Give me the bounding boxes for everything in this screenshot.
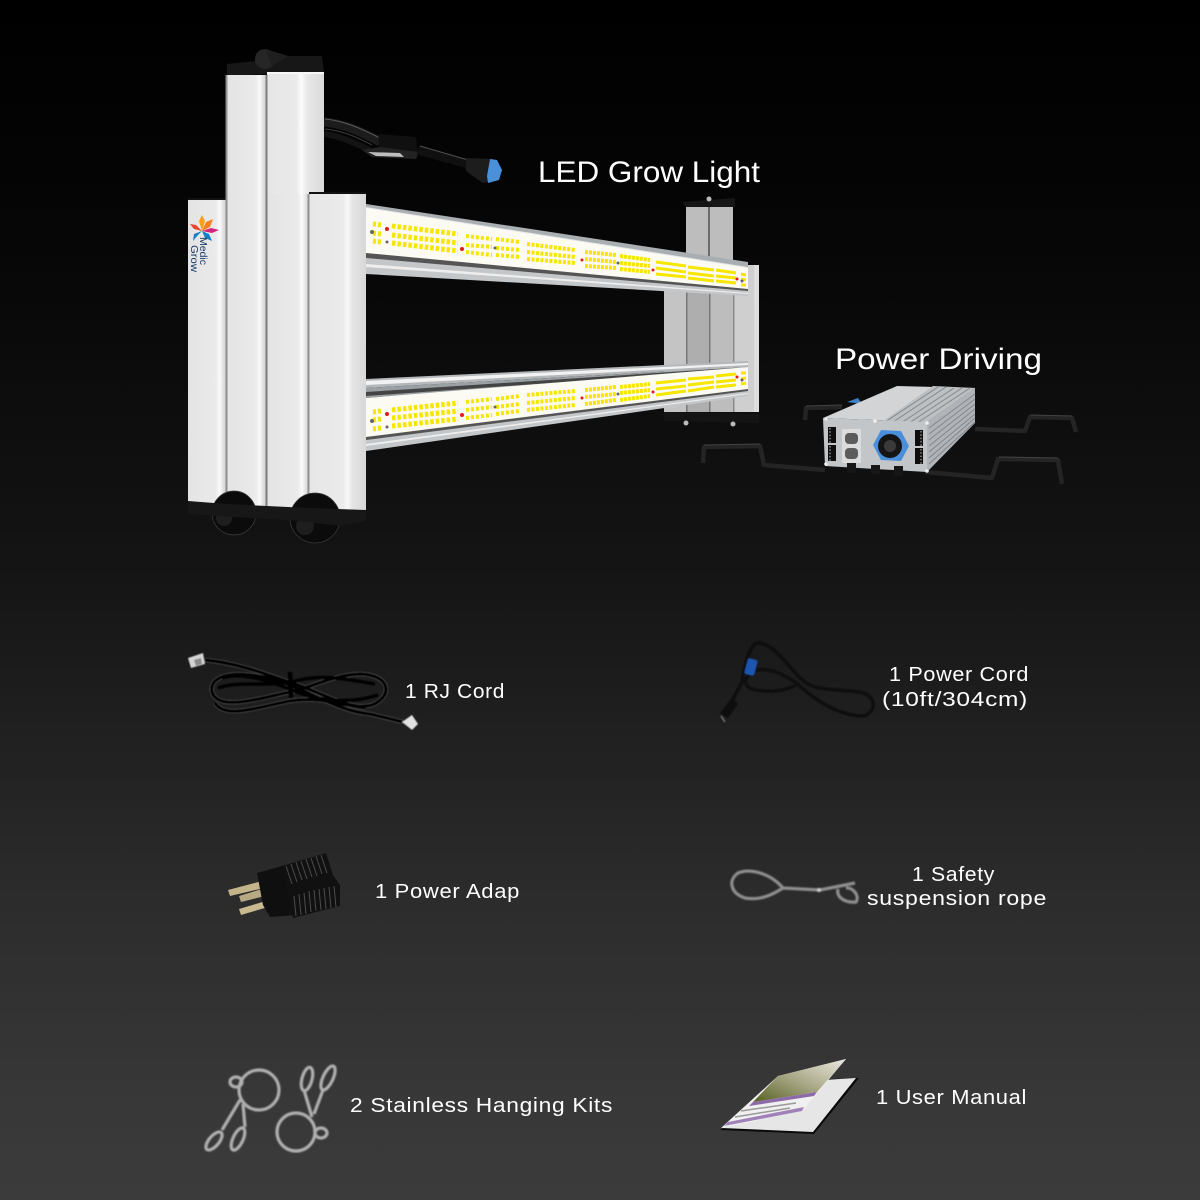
rear end bracket	[664, 196, 759, 426]
label: 1 RJ Cord: 1 RJ Cord	[405, 681, 505, 703]
power adapter	[228, 853, 340, 918]
power cord	[720, 643, 873, 722]
power cable with connector	[324, 119, 502, 183]
kit 2	[277, 1064, 338, 1151]
column B	[227, 75, 266, 506]
label: 1 Power Cord (10ft/304cm)	[882, 664, 1029, 711]
mounting column group	[188, 49, 366, 543]
front plate	[823, 418, 927, 472]
RJ ports	[842, 429, 861, 463]
lower LED bar	[366, 361, 748, 451]
top fins	[823, 386, 975, 422]
safety suspension rope	[732, 871, 857, 902]
label: 1 Safety suspension rope: suspension rope	[867, 888, 1047, 910]
logo: Medic Grow: Medic	[197, 237, 209, 265]
bottom wheels and base	[188, 491, 366, 543]
column D	[309, 192, 366, 510]
stainless hanging kits	[203, 1064, 338, 1153]
label: 1 Power Adap: 1 Power Adap	[375, 881, 520, 903]
upper LED bar	[366, 204, 748, 296]
label: LED Grow Light: LED Grow Light	[538, 156, 761, 189]
power driver unit	[703, 386, 1076, 484]
label: 1 Safety suspension rope	[867, 864, 1047, 910]
label: Power Driving: Power Driving	[835, 343, 1042, 376]
label: 2 Stainless Hanging Kits: 2 Stainless Hanging Kits	[350, 1095, 613, 1117]
mounting brackets	[703, 405, 1076, 484]
kit 1	[203, 1070, 279, 1153]
label: 1 User Manual: 1 User Manual	[876, 1087, 1027, 1109]
label: 1 Power Cord (10ft/304cm): 1 Power Cord	[889, 664, 1029, 686]
LED grow light	[188, 49, 759, 543]
column A with logo	[188, 198, 226, 503]
top cap with knob	[227, 49, 324, 76]
logo: Medic Grow: Grow	[188, 245, 200, 272]
logo: Medic Grow	[188, 215, 219, 272]
column C	[267, 72, 324, 509]
bottom screws	[847, 463, 903, 476]
RJ cord	[188, 653, 418, 730]
user manual	[720, 1059, 859, 1134]
label: 1 Safety suspension rope: 1 Safety	[912, 864, 995, 886]
label: 1 Power Cord (10ft/304cm): (10ft/304cm)	[882, 689, 1028, 711]
vents	[828, 427, 923, 464]
blue hex connector	[873, 430, 909, 461]
side fins	[927, 388, 975, 472]
